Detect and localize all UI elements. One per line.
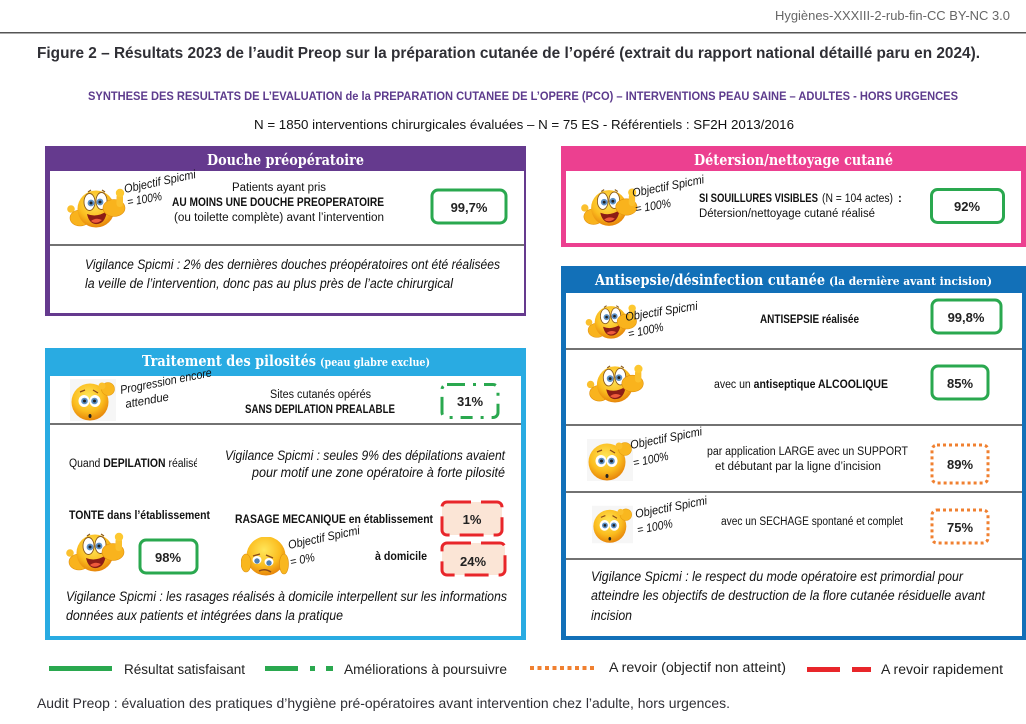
value 75%: [932, 510, 988, 543]
value 98%: [140, 540, 197, 573]
objective label: [629, 424, 704, 470]
indicator text: AU MOINS UNE DOUCHE PREOPERATOIRE: [172, 197, 384, 209]
indicator text: ANTISEPSIE réalisée: [760, 314, 859, 326]
legend: satisfaisant: Résultat satisfaisant: [124, 662, 245, 677]
value 31%: [442, 384, 498, 418]
depilation label: Quand DEPILATION réalisée: [69, 458, 205, 470]
value 1%: 1%: [463, 512, 482, 527]
progression label: attendue: [124, 389, 170, 411]
value 99,7%: [432, 190, 506, 223]
objective label: Objectif Spicmi: [287, 523, 361, 552]
vigilance note: antisepsie: atteindre les objectifs de destruction de la flore cutanée résiduelle avant: [591, 588, 986, 603]
indicator text: Patients ayant pris: [232, 182, 326, 194]
value 1%: [442, 502, 502, 535]
indicator text: avec un antiseptique ALCOOLIQUE: [714, 379, 888, 391]
panel: détersion: [561, 146, 1026, 247]
vigilance note: rasage: données aux patients et intégrées dans la pratique: [66, 608, 343, 623]
value 75%: 75%: [947, 520, 973, 535]
indicator text: [707, 446, 908, 473]
objective label: [624, 299, 699, 341]
vigilance note: antisepsie: incision: [591, 608, 632, 623]
icon: worried emoji: [587, 439, 633, 481]
value 89%: [932, 445, 988, 483]
indicator text: [245, 389, 395, 416]
heading: traitement: (peau glabre exclue): [320, 356, 430, 369]
objective label: Objectif Spicmi: [123, 167, 197, 196]
value 89%: 89%: [947, 457, 973, 472]
vigilance note: antisepsie: [591, 569, 986, 623]
legend: à revoir rapidement: A revoir rapidement: [881, 662, 1003, 677]
value 92%: [932, 190, 1004, 222]
value 31%: 31%: [457, 394, 483, 409]
objective label: Objectif Spicmi: [624, 299, 699, 324]
indicator text: (N = 104 actes): [822, 193, 893, 205]
icon: worried emoji: [592, 506, 633, 543]
heading: douche: Douche préopératoire: [207, 151, 364, 169]
legend: à revoir rapidement: [807, 662, 1003, 677]
vigilance note: rasage: Vigilance Spicmi : les rasages réalisés à domicile interpellent sur les informations: [66, 589, 507, 604]
icon: thumbs up emoji: [581, 188, 637, 226]
objective label: = 0%: [289, 550, 316, 569]
icon: thumbs up emoji: [586, 305, 637, 339]
indicator text: Sites cutanés opérés: [270, 389, 371, 401]
legend: améliorations: Améliorations à poursuivre: [344, 662, 507, 677]
legend: à revoir: A revoir (objectif non atteint): [609, 660, 786, 675]
value 85%: 85%: [947, 376, 973, 391]
value 24%: [442, 543, 505, 575]
heading: antisepsie: [594, 271, 992, 289]
objective label: Objectif Spicmi: [631, 172, 706, 200]
running header: Hygiènes-XXXIII-2-rub-fin-CC BY-NC 3.0: [775, 9, 1010, 23]
subtitle: SYNTHESE DES RESULTATS DE L’EVALUATION de la PREPARATION CUTANEE DE L’OPERE (PCO) – INTERVENTIONS PEAU SAINE – ADULTES - HORS URGENCES: [88, 89, 958, 103]
progression label: Progression encore: [119, 365, 213, 397]
panel: traitement des pilosités: [45, 348, 526, 640]
indicator text: par application LARGE avec un SUPPORT: [707, 446, 908, 458]
panel: douche préopératoire: [45, 146, 526, 316]
objective label: [631, 172, 706, 216]
vigilance note: [85, 257, 500, 291]
objective label: = 100%: [636, 516, 674, 537]
indicator text: avec un SECHAGE spontané et complet: [721, 516, 904, 528]
icon: worried emoji: [70, 379, 116, 421]
indicator text: [172, 182, 384, 224]
indicator text: :: [898, 193, 902, 205]
heading: traitement: Traitement des pilosités: [142, 352, 316, 370]
vigilance note: la veille de l’intervention, donc pas au plus près de l’acte chirurgical: [85, 276, 454, 291]
icon: thumbs up emoji: [66, 533, 124, 572]
icon: thumbs up emoji: [67, 189, 125, 228]
vigilance note: depilation: Vigilance Spicmi : seules 9% des dépilations avaient: [225, 448, 506, 463]
objective label: = 100%: [634, 196, 672, 216]
figure title: Figure 2 – Résultats 2023 de l’audit Preop sur la préparation cutanée de l’opéré (extrait du rapport national détaillé paru en 2024).: [37, 45, 980, 62]
footnote: Audit Preop : évaluation des pratiques d’hygiène pré-opératoires avant intervention chez l’adulte, hors urgences.: [37, 695, 730, 711]
vigilance note: depilation: pour motif une zone opératoire à forte pilosité: [251, 465, 505, 480]
heading: antisepsie: (la dernière avant incision): [829, 275, 992, 288]
rasage label: RASAGE MECANIQUE en établissement: [235, 514, 433, 526]
objective label: [123, 167, 197, 209]
objective label: Objectif Spicmi: [634, 493, 709, 521]
vigilance note: antisepsie: Vigilance Spicmi : le respect du mode opératoire est primordial pour: [591, 569, 963, 584]
panel: antisepsie: [561, 266, 1026, 640]
value 24%: 24%: [460, 554, 486, 569]
objective label: = 100%: [126, 189, 163, 209]
heading: antisepsie: Antisepsie/désinfection cutanée: [594, 271, 825, 289]
progression label: [119, 365, 213, 411]
indicator text: (ou toilette complète) avant l’intervention: [174, 212, 384, 224]
value 99,8%: 99,8%: [948, 310, 985, 325]
objective label: = 100%: [627, 320, 665, 341]
objective label: [634, 493, 709, 537]
indicator text: SI SOUILLURES VISIBLES: [699, 193, 818, 205]
vigilance note: depilation: [225, 448, 506, 480]
value 98%: 98%: [155, 550, 181, 565]
vigilance note: rasage: [66, 589, 507, 623]
icon: sad emoji: [241, 536, 288, 576]
objective label: = 100%: [632, 449, 670, 470]
sample size line: N = 1850 interventions chirurgicales évaluées – N = 75 ES - Référentiels : SF2H 2013/2016: [254, 117, 794, 132]
indicator text: [699, 193, 902, 220]
value 92%: 92%: [954, 199, 980, 214]
à domicile label: à domicile: [375, 551, 427, 563]
indicator text: Détersion/nettoyage cutané réalisé: [699, 208, 875, 220]
indicator text: SANS DEPILATION PREALABLE: [245, 404, 395, 416]
legend: améliorations: [265, 662, 507, 677]
heading: détersion: Détersion/nettoyage cutané: [694, 151, 893, 169]
objective label: [287, 523, 361, 569]
indicator text: et débutant par la ligne d’incision: [715, 461, 881, 473]
value 99,8%: [932, 300, 1001, 333]
legend: [49, 660, 1003, 677]
icon: thumbs up emoji: [587, 365, 643, 403]
value 99,7%: 99,7%: [451, 200, 488, 215]
objective label: Objectif Spicmi: [629, 424, 704, 452]
tonte label: TONTE dans l’établissement: [69, 510, 210, 522]
vigilance note: Vigilance Spicmi : 2% des dernières douches préopératoires ont été réalisées: [85, 257, 500, 272]
legend: satisfaisant: [49, 662, 245, 677]
value 85%: [932, 366, 988, 399]
